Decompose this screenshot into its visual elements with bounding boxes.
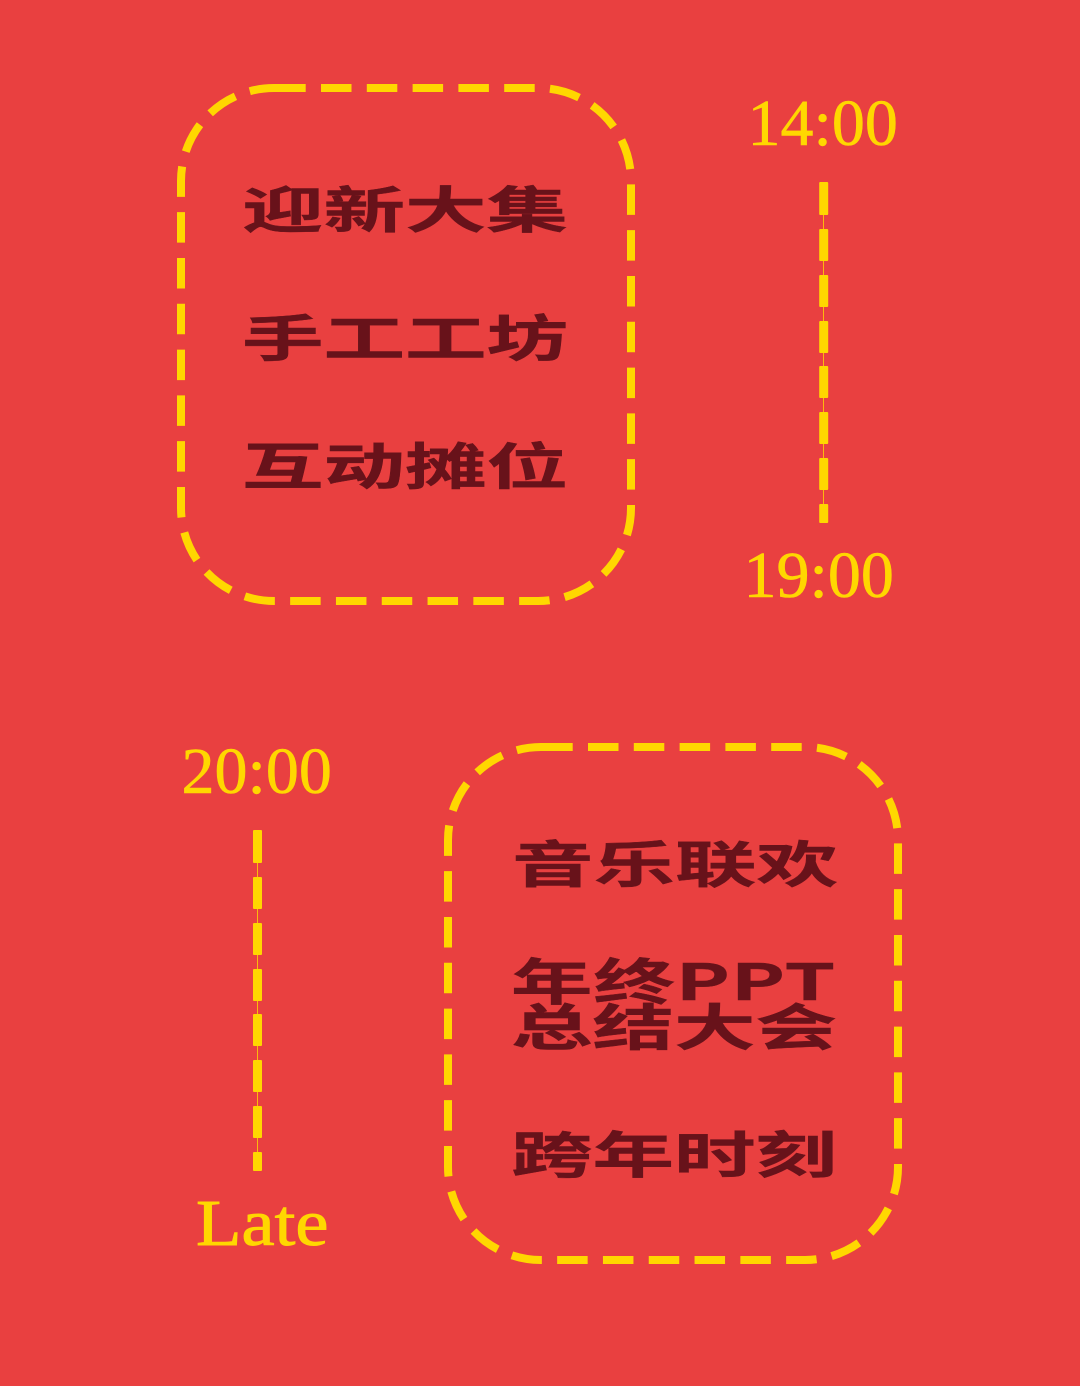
text: countdown moment: 跨年时刻 [511,1116,837,1188]
text: year-end PPT review: 年终PPT [511,943,836,1015]
panel: afternoon activities [181,88,631,601]
time: Late: Late [196,1187,328,1260]
time: 20:00: 20:00 [182,735,332,808]
text: craft workshop: 手工工坊 [242,300,568,371]
panel: evening activities [448,747,898,1260]
time: 19:00: 19:00 [744,539,894,612]
text: annual summary meeting: 总结大会 [511,989,837,1060]
timeline: evening [253,830,262,1171]
time: 14:00: 14:00 [748,87,898,160]
dashed rounded frame [181,88,631,601]
text: welcome market: 迎新大集 [242,171,568,243]
timeline: afternoon [819,182,828,523]
text: interactive stalls: 互动摊位 [242,428,568,499]
text: music party: 音乐联欢 [512,826,838,897]
dashed rounded frame [448,747,898,1260]
